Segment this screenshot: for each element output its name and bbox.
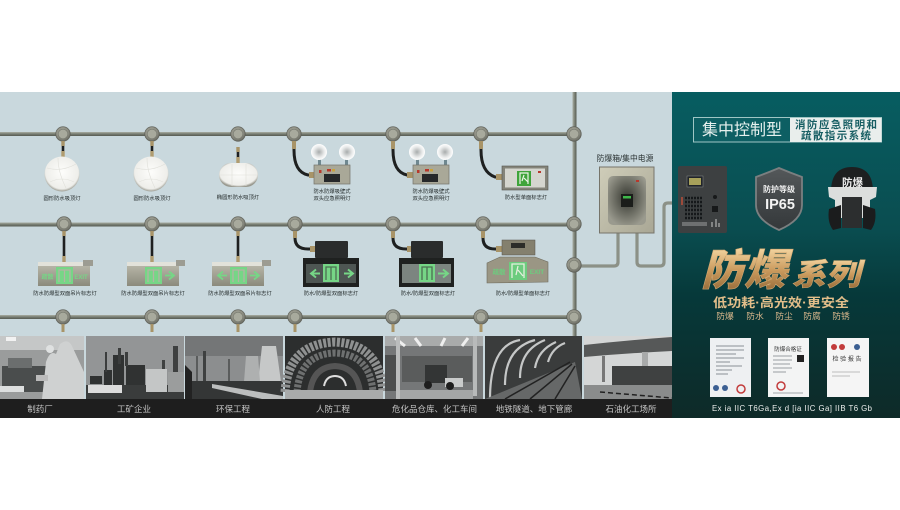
lamp: single-face exit sign, wall box	[479, 141, 548, 190]
row 3 junction stubs	[62, 324, 482, 332]
label: black sign 1: 防水/防爆型双面标志灯	[304, 289, 359, 297]
certificate 2: 防爆合格证	[774, 345, 802, 353]
banner subtitle: 消防应急照明和	[795, 118, 877, 131]
caption: petrochemical: 石油化工场所	[605, 404, 657, 414]
icon: IP65 protection shield	[756, 168, 802, 230]
caption: environmental: 环保工程	[216, 404, 250, 414]
certificate 2	[768, 338, 809, 397]
label: twin-head light 1: 双头应急照明灯	[313, 194, 351, 202]
icon: explosion-proof helmet	[828, 167, 877, 230]
label: round lamp 1: 圆形防水吸顶灯	[43, 194, 81, 202]
explosion-proof rating text: Ex ia IIC T6Ga,Ex d [ia IIC Ga] IIB T6 Gb	[712, 404, 873, 413]
caption: subway: 地铁隧道、地下管廊	[496, 404, 573, 414]
lamp: twin-head emergency light 1	[292, 141, 355, 184]
sign: hanging double-face sign 1	[38, 231, 93, 286]
device: explosion-proof power box	[600, 167, 654, 233]
label: hanging sign 1: 防水防爆型双面吊片标志灯	[33, 289, 97, 297]
row 3 junctions	[56, 310, 581, 324]
helmet text: 防爆	[842, 176, 863, 189]
feature list: 防水	[746, 310, 764, 321]
row 1 junctions	[56, 127, 581, 141]
photo: civil defence tunnel	[285, 336, 383, 399]
title banner	[694, 118, 882, 142]
photo: pharmaceutical factory	[0, 336, 84, 399]
pipe network	[0, 92, 678, 336]
sign: brass single-face sign: 疏散	[492, 267, 506, 276]
sign: hanging double-face sign 1: EXIT	[74, 275, 88, 281]
sign: brass single-face sign: EXIT	[530, 269, 544, 276]
lamp: round ceiling lamp 1	[44, 141, 80, 192]
feature list: 防锈	[832, 310, 850, 321]
panel: teal product panel	[672, 92, 900, 418]
feature list: 防爆	[716, 310, 734, 321]
sign: hanging double-face sign 1: 疏散	[41, 273, 54, 281]
certificate 3: 检 验 报 告	[832, 355, 862, 363]
label: hanging sign 2: 防水防爆型双面吊片标志灯	[121, 289, 185, 297]
photo: subway tunnel	[485, 336, 582, 399]
caption: mining: 工矿企业	[117, 404, 151, 414]
label: twin-head light 2: 双头应急照明灯	[412, 194, 450, 202]
caption strip	[0, 399, 672, 418]
label: single-face sign: 防水型单面标志灯	[505, 193, 548, 201]
certificate 3	[827, 338, 869, 397]
label: twin-head light 1: 防水防爆吸壁式	[313, 189, 351, 195]
photo: mining industry	[86, 336, 184, 399]
lamp: round ceiling lamp 2	[134, 141, 168, 192]
heading: explosion-proof box label: 防爆箱/集中电源	[597, 153, 654, 163]
photo: petrol station	[584, 336, 672, 399]
caption: warehouse: 危化品仓库、化工车间	[392, 404, 477, 414]
sign: hanging double-face sign 2	[127, 231, 185, 286]
label: oval lamp: 椭圆形防水吸顶灯	[217, 193, 260, 201]
main title: explosion-proof series: 防爆	[698, 247, 797, 295]
main title: explosion-proof series: 系列	[790, 257, 867, 292]
panel: lighting system background	[0, 92, 672, 418]
device: central control panel	[678, 166, 727, 233]
lamp: twin-head emergency light 2	[391, 141, 453, 184]
label: black sign 2: 防水/防爆型双面标志灯	[401, 289, 456, 297]
photo: environmental engineering	[185, 336, 283, 399]
caption: pharmaceutical: 制药厂	[27, 404, 53, 414]
label: brass sign: 防水/防爆型单面标志灯	[496, 289, 551, 297]
feature list	[716, 310, 850, 321]
sign: black double-face sign 2	[391, 231, 454, 287]
lamp: oval ceiling lamp	[219, 147, 258, 187]
sign: black double-face sign 1	[293, 231, 359, 287]
banner title: 集中控制型	[702, 121, 782, 139]
slogan: 低功耗·高光效·更安全	[713, 295, 850, 310]
banner subtitle: 疏散指示系统	[801, 129, 872, 142]
row 2 junctions	[57, 217, 581, 272]
sign: brass single-face sign	[481, 231, 548, 283]
caption: civil defence: 人防工程	[316, 404, 350, 414]
label: hanging sign 3: 防水防爆型双面吊片标志灯	[208, 289, 272, 297]
main title: explosion-proof series	[698, 247, 870, 295]
label: twin-head light 2: 防水防爆吸壁式	[412, 189, 450, 195]
certificate 1	[710, 338, 751, 397]
photo: hazardous warehouse	[385, 336, 483, 399]
sign: hanging double-face sign 3	[212, 231, 271, 286]
shield text top: 防护等级	[763, 184, 795, 194]
banner subtitle	[795, 118, 877, 142]
label: round lamp 2: 圆形防水吸顶灯	[133, 194, 171, 202]
feature list: 防尘	[775, 310, 793, 321]
feature list: 防腐	[803, 310, 821, 321]
shield text IP65: IP65	[765, 197, 795, 213]
